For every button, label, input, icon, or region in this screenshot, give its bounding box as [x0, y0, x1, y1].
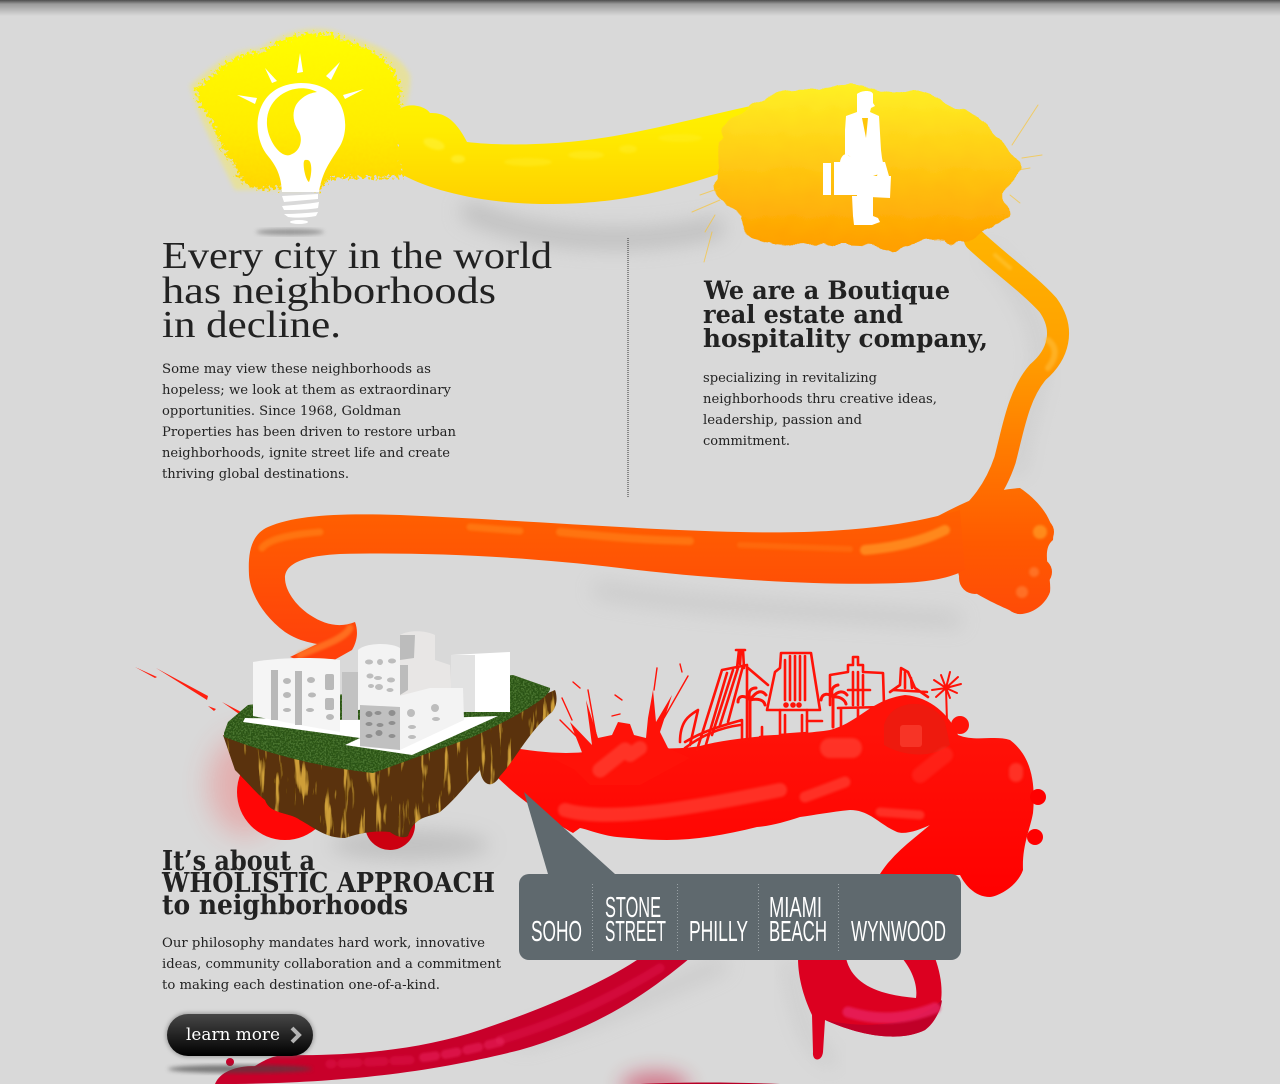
boutique heading: real estate and	[703, 300, 903, 329]
blob lumps	[959, 518, 1054, 614]
intro body text: hopeless; we look at them as extraordinary	[162, 383, 452, 398]
red blobs under island	[237, 744, 333, 840]
wholistic body text	[162, 936, 502, 993]
red ribbon	[209, 664, 1046, 897]
intro body text: neighborhoods, ignite street life and create	[162, 446, 450, 461]
icon: businessman with luggage	[823, 91, 891, 225]
orange blob end	[925, 488, 1053, 614]
neighborhood names	[531, 892, 946, 948]
yellow splash behind figure	[692, 85, 1042, 262]
intro heading: Every city in the world	[162, 235, 552, 277]
intro heading	[162, 235, 552, 346]
front block	[360, 688, 464, 750]
right descending stream	[955, 240, 1058, 530]
neighborhood label panel	[519, 792, 961, 960]
neighborhood names: PHILLY	[689, 916, 748, 948]
ribbon highlights	[262, 255, 1055, 655]
deco theatre	[680, 650, 768, 750]
island cast shadow	[330, 831, 490, 859]
palm tree right	[932, 672, 961, 722]
floating island	[135, 631, 557, 838]
art deco hotel	[830, 657, 884, 727]
intro body text: Some may view these neighborhoods as	[162, 362, 431, 377]
fine splatter lines	[560, 664, 688, 745]
boutique body text	[703, 371, 937, 449]
spray behind island	[209, 735, 281, 835]
crimson highlights	[330, 968, 935, 1064]
intro body text	[162, 362, 457, 482]
crimson ribbon	[215, 958, 942, 1084]
intro body text: opportunities. Since 1968, Goldman	[162, 404, 402, 419]
faded outer splash	[190, 29, 410, 190]
ribbon shadows	[470, 212, 1041, 1060]
wholistic heading: to neighborhoods	[162, 890, 408, 921]
bulb splash	[196, 33, 405, 190]
main orange band	[249, 510, 965, 668]
wholistic heading	[161, 846, 495, 921]
neighborhood names: STREET	[605, 916, 666, 948]
centre round tower	[358, 644, 400, 710]
paint splatter lines	[692, 105, 1042, 262]
crimson loop	[798, 958, 942, 1060]
stream highlights	[422, 134, 702, 166]
bulb shadow	[256, 229, 324, 235]
neighborhood names: STONE	[605, 892, 661, 924]
palm trees	[738, 685, 847, 739]
boutique heading	[703, 276, 988, 353]
neighborhood names: BEACH	[769, 916, 827, 948]
wholistic heading: It’s about a	[162, 846, 315, 877]
stream highlights	[565, 748, 1016, 815]
soil	[223, 690, 557, 838]
splatter	[550, 690, 690, 785]
tower windows	[365, 658, 396, 692]
column dividers	[592, 884, 838, 951]
grass top	[224, 675, 550, 773]
panel body	[519, 874, 961, 960]
round drops	[951, 716, 969, 734]
intro heading: has neighborhoods	[162, 270, 496, 312]
intro body text: Properties has been driven to restore urban	[162, 425, 457, 440]
boutique heading: hospitality company,	[703, 324, 988, 353]
boutique body text: specializing in revitalizing	[703, 371, 877, 386]
stepped tower	[760, 653, 822, 737]
boutique body text: leadership, passion and	[703, 413, 862, 428]
small deco tower	[890, 668, 928, 697]
tall rear block	[451, 652, 510, 712]
skyline illustration	[680, 650, 961, 750]
boutique heading: We are a Boutique	[703, 276, 950, 305]
button: learn more: learn more	[186, 1025, 280, 1045]
pointer	[524, 792, 615, 874]
icon: light bulb	[237, 53, 364, 224]
button: learn more	[166, 1013, 314, 1073]
boutique body text: neighborhoods thru creative ideas,	[703, 392, 937, 407]
neighborhood names: WYNWOOD	[851, 916, 946, 948]
dome shading	[884, 704, 950, 754]
top shadow bar	[0, 0, 1280, 16]
left apartment block	[253, 658, 340, 732]
red dashes	[135, 667, 245, 716]
wholistic body text: to making each destination one-of-a-kind.	[162, 978, 440, 993]
long crimson band	[215, 958, 690, 1084]
inner building stamp	[900, 725, 922, 747]
red stream body	[490, 695, 1034, 897]
rear buildings	[400, 631, 452, 700]
orange ribbon	[249, 240, 1058, 668]
neighborhood names: SOHO	[531, 916, 582, 948]
wholistic heading: WHOLISTIC APPROACH	[161, 868, 495, 899]
bottom spray	[621, 1072, 689, 1084]
boutique body text: commitment.	[703, 434, 790, 449]
neighborhood names: MIAMI	[769, 892, 822, 924]
dotted divider	[627, 238, 629, 498]
white platform	[243, 716, 498, 755]
wholistic body text: ideas, community collaboration and a commitment	[162, 957, 502, 972]
wholistic body text: Our philosophy mandates hard work, innovative	[162, 936, 485, 951]
intro body text: thriving global destinations.	[162, 467, 349, 482]
intro heading: in decline.	[162, 304, 341, 346]
yellow ribbon	[190, 29, 780, 204]
stream to the briefcase figure	[395, 102, 780, 204]
